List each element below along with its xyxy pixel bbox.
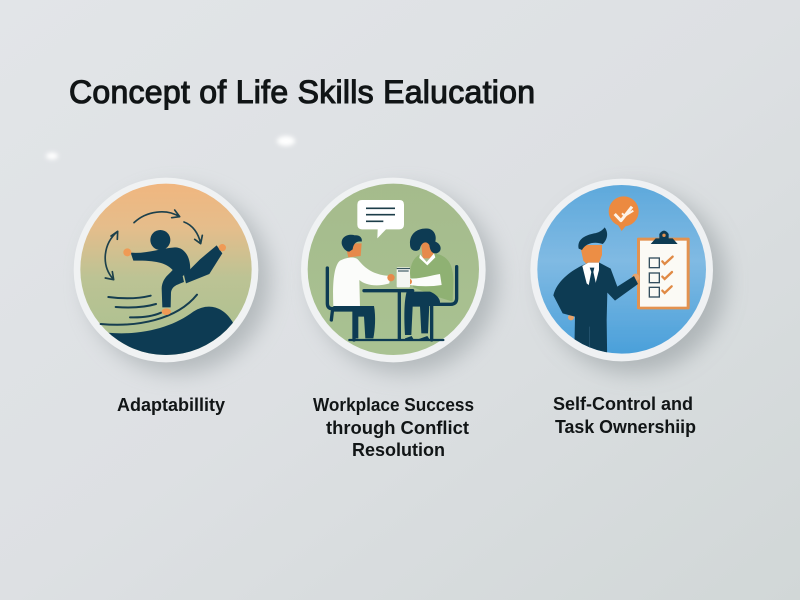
icon: clipboard — [637, 231, 690, 309]
title: Concept of Life Skills Ealucation — [69, 74, 535, 110]
label: workplace success: Resolution — [352, 440, 445, 460]
icon: man — [333, 235, 395, 338]
icon: motion lines — [101, 295, 197, 325]
icon: woman — [404, 228, 453, 340]
icon: adaptability badge — [74, 178, 258, 370]
icon: rotation arrows — [105, 210, 202, 280]
icon: jumping figure — [123, 230, 226, 315]
icon: chairs and table — [327, 267, 457, 340]
icon: speech bubble — [357, 200, 404, 238]
label: self-control: Self-Control and — [553, 394, 693, 414]
label: workplace success: Workplace Success — [313, 395, 474, 415]
icon: task ownership badge — [530, 179, 713, 370]
panel: adaptability — [74, 178, 270, 373]
icon: hill — [108, 306, 233, 355]
icon: badge shadow — [542, 189, 726, 373]
icon: check badge — [609, 196, 639, 231]
panel: self-control — [530, 179, 726, 373]
icon: conflict resolution badge — [301, 178, 486, 362]
label: workplace success: through Conflict — [326, 418, 469, 438]
label: self-control — [553, 394, 696, 437]
icon: businessman — [553, 228, 640, 352]
label: adaptability: Adaptabillity — [117, 395, 225, 415]
label: self-control: Task Ownershiip — [555, 417, 696, 437]
icon: badge shadow — [86, 189, 270, 373]
panel: workplace success — [301, 178, 497, 373]
icon: cup — [397, 267, 410, 287]
icon: badge shadow — [313, 189, 497, 373]
label: workplace success — [313, 395, 474, 460]
